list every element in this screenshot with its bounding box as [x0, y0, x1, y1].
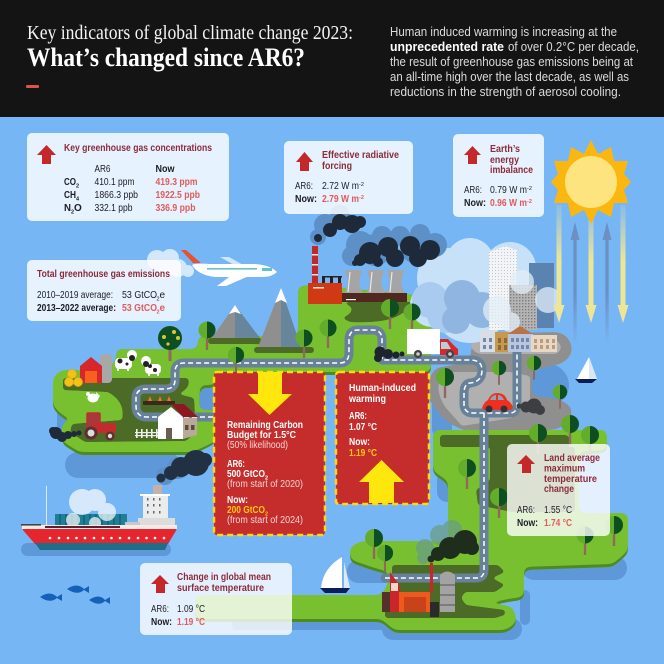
heading: Total greenhouse gas emissions	[37, 269, 170, 280]
values	[517, 505, 572, 529]
intro paragraph: the result of greenhouse gas emissions being at	[390, 55, 633, 69]
road network	[136, 330, 517, 578]
gas table: 419.3 ppm	[156, 177, 198, 188]
orange hall	[399, 592, 430, 612]
values: Now:	[151, 617, 172, 628]
smoke above the power station	[310, 205, 447, 267]
city ground	[428, 332, 572, 432]
sun rays arrows: incoming and outgoing	[554, 205, 628, 346]
values: 1.19 °C	[177, 617, 205, 628]
gas table: 2	[71, 210, 74, 216]
values: AR6:	[295, 181, 313, 192]
delivery truck	[374, 329, 458, 362]
power station	[308, 246, 407, 304]
gas table: 2	[76, 184, 79, 190]
fence	[135, 429, 160, 438]
icon: sun	[551, 140, 631, 224]
values: Now:	[227, 495, 248, 506]
chimney	[312, 246, 318, 286]
intro paragraph	[390, 25, 639, 99]
panel: change in global mean surface temperature	[140, 563, 292, 635]
values: -2	[359, 195, 364, 201]
values: 1.07 °C	[349, 422, 377, 433]
gas table	[64, 164, 200, 216]
icon: up arrow	[517, 455, 535, 473]
intro paragraph: unprecedented rate	[390, 40, 504, 54]
icon: up arrow	[296, 152, 313, 171]
title line one: Key indicators of global climate change 2023:	[27, 22, 353, 44]
panel: remaining carbon budget: (50% likelihood)	[227, 440, 288, 451]
tractor with exhaust	[49, 413, 116, 442]
heading: Earth’s	[490, 144, 520, 155]
skyline and haze cloud	[410, 238, 561, 352]
historic buildings row	[480, 326, 557, 352]
values	[37, 290, 166, 316]
panel: earth's energy imbalance: imbalance	[490, 165, 533, 176]
values	[349, 411, 377, 459]
values: 2	[156, 310, 160, 316]
values: (from start of 2020)	[227, 479, 303, 490]
mountains	[212, 288, 301, 347]
panel: earth's energy imbalance: energy	[490, 155, 519, 166]
gas table: Now	[156, 164, 175, 175]
values: Now:	[295, 194, 317, 205]
values: -2	[527, 199, 532, 205]
heading: Key greenhouse gas concentrations	[64, 143, 212, 154]
values: 0.96 W m	[490, 198, 527, 209]
gas table: CO	[64, 177, 76, 188]
values: 2	[265, 476, 268, 482]
panel: key greenhouse gas concentrations	[27, 133, 229, 221]
intro paragraph: Human induced warming is increasing at the	[390, 25, 617, 39]
gas table: N	[64, 203, 71, 214]
icon: plane with contrail	[147, 249, 277, 286]
outgoing arrows	[570, 222, 612, 346]
white tower	[489, 246, 517, 330]
gas table: 336.9 ppb	[156, 203, 196, 214]
fish	[40, 586, 110, 604]
values: 53 GtCO	[122, 303, 157, 314]
values: AR6:	[349, 411, 367, 422]
grey building	[509, 285, 537, 330]
heading: Remaining Carbon	[227, 420, 303, 431]
farmhouse	[158, 404, 198, 439]
values: -2	[527, 186, 532, 192]
values: 1.55 °C	[544, 505, 572, 516]
panel: effective radiative forcing: forcing	[322, 161, 352, 172]
values	[464, 185, 532, 209]
values: 2	[265, 512, 268, 518]
red tower	[390, 572, 400, 612]
heading: Land average	[544, 453, 600, 464]
header band	[0, 0, 664, 117]
values: 1.09 °C	[177, 604, 205, 615]
panel: land average maximum temperature change	[507, 444, 610, 536]
values: AR6:	[227, 459, 245, 470]
cows	[115, 350, 161, 376]
gas table: O	[74, 203, 82, 214]
values: 1.19 °C	[349, 448, 377, 459]
values: 500 GtCO	[227, 469, 265, 480]
red car with exhaust	[482, 393, 545, 415]
cooling towers	[344, 270, 363, 295]
values: Now:	[464, 198, 486, 209]
values: 2013–2022 average:	[37, 303, 116, 314]
blue tower	[529, 263, 554, 328]
chimney	[430, 563, 433, 593]
hay bales	[64, 370, 82, 386]
icon: up arrow	[359, 460, 404, 503]
values: AR6:	[151, 604, 169, 615]
icon: fruit tree	[158, 326, 182, 361]
values: Now:	[349, 437, 370, 448]
intro paragraph: reductions in the strength of aerosol cooling.	[390, 85, 621, 99]
panel: change in global mean surface temperature: surface temperature	[177, 583, 264, 594]
icon: up arrow	[151, 575, 169, 593]
smoke	[416, 520, 462, 564]
smoke above the ship	[156, 450, 212, 485]
values	[151, 604, 205, 628]
panel: total greenhouse gas emissions	[27, 260, 181, 321]
values: Now:	[517, 518, 538, 529]
gas table: CH	[64, 190, 76, 201]
panel: effective radiative forcing	[284, 141, 413, 214]
silo	[440, 572, 455, 612]
panel: land average maximum temperature change: change	[544, 484, 574, 495]
title line two: What’s changed since AR6?	[27, 43, 305, 72]
black block	[430, 602, 439, 617]
values: 2	[156, 296, 160, 302]
haze cloud	[410, 238, 552, 343]
left annex	[382, 592, 390, 612]
values: AR6:	[517, 505, 535, 516]
panel: earth's energy imbalance	[453, 134, 544, 217]
land mass: southern islands	[197, 432, 626, 631]
values: e	[160, 290, 166, 301]
panel: land average maximum temperature change: temperature	[544, 474, 597, 485]
values: (from start of 2024)	[227, 515, 303, 526]
dark green fields	[63, 302, 575, 618]
values: 0.79 W m	[490, 185, 527, 196]
station base	[342, 293, 407, 302]
values	[227, 459, 303, 526]
values	[295, 181, 364, 205]
values: 1.74 °C	[544, 518, 572, 529]
values: e	[160, 303, 166, 314]
gas table: 1866.3 ppb	[94, 190, 138, 201]
trees	[198, 299, 623, 572]
intro paragraph: an all-time high over the last decade, as well as	[390, 70, 629, 84]
factory building	[308, 283, 342, 304]
vegetable patch	[143, 396, 175, 405]
values: 2.79 W m	[322, 194, 359, 205]
land mass: farm, mountains and power station	[55, 287, 429, 453]
heading: Effective radiative	[322, 150, 399, 161]
panel: remaining carbon budget: Budget for 1.5°C	[227, 430, 296, 441]
sailboat east	[575, 357, 597, 383]
values: 2.72 W m	[322, 181, 359, 192]
southern factory	[382, 520, 479, 617]
chicken	[86, 392, 100, 402]
container ship	[21, 485, 177, 556]
gas table: 4	[76, 196, 80, 202]
values: 2010–2019 average:	[37, 290, 113, 301]
values: 53 GtCO	[122, 290, 157, 301]
panel: remaining carbon budget	[214, 372, 325, 535]
intro paragraph: of over 0.2°C per decade,	[508, 40, 639, 54]
heading: Change in global mean	[177, 572, 271, 583]
values: 200 GtCO	[227, 505, 265, 516]
gas table: 332.1 ppb	[94, 203, 133, 214]
gas table: 1922.5 ppb	[156, 190, 200, 201]
icon: down arrow	[248, 372, 292, 415]
values: AR6:	[464, 185, 482, 196]
values: -2	[359, 182, 364, 188]
gas table: AR6	[94, 164, 111, 175]
red dash	[26, 85, 39, 88]
panel: human-induced warming	[336, 372, 429, 504]
sailboat south	[320, 557, 350, 593]
panel: land average maximum temperature change: maximum	[544, 464, 585, 474]
panel: human-induced warming: warming	[348, 394, 386, 405]
water shadows under the land	[57, 363, 627, 640]
barn and silo	[80, 354, 112, 383]
icon: up arrow	[37, 145, 56, 164]
gas table: 410.1 ppm	[94, 177, 134, 188]
incoming arrows	[554, 205, 628, 323]
heading: Human-induced	[349, 383, 416, 394]
icon: up arrow	[464, 146, 481, 164]
